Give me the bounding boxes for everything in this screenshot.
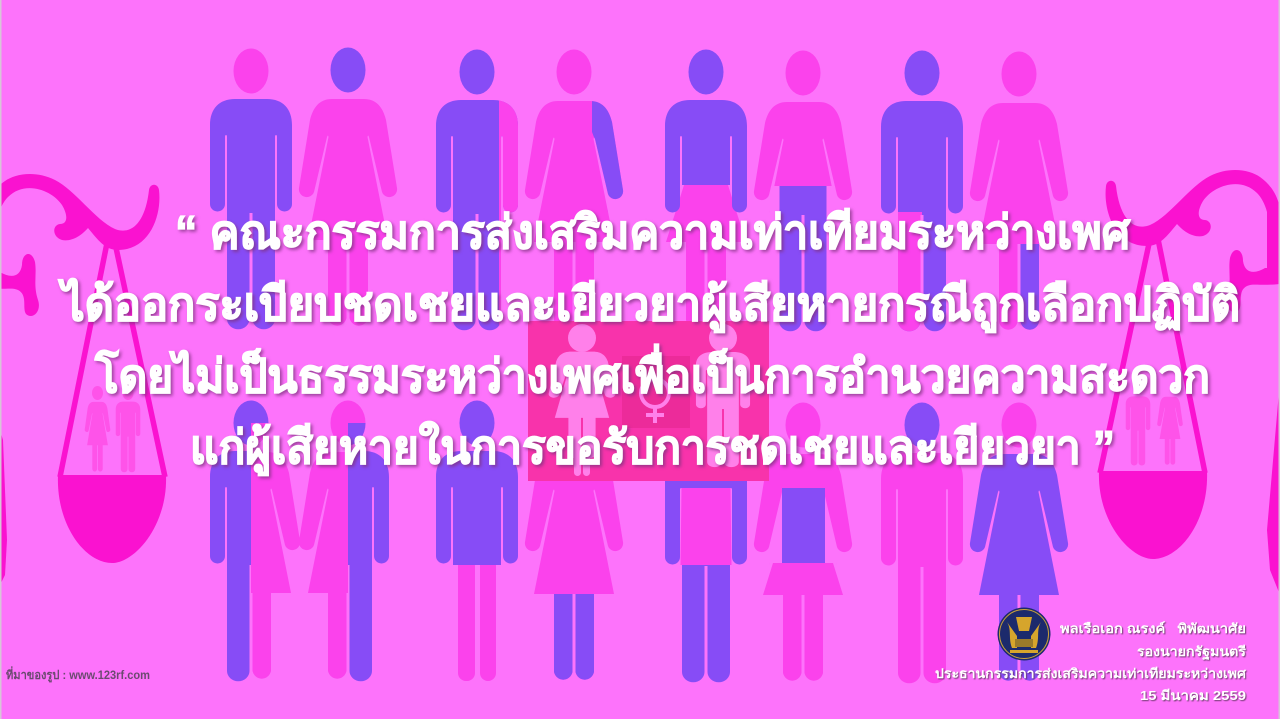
- figure: woman with purple torso: [754, 402, 852, 681]
- icon: right scale pan: [1099, 170, 1280, 595]
- icon: couple in right scale pan: [1126, 396, 1183, 465]
- signature text block: ประธานกรรมการส่งเสริมความเท่าเทียมระหว่างเพศ: [935, 666, 1247, 681]
- figure: man with pink tunic: [665, 402, 747, 682]
- icon: female symbol: [641, 379, 669, 423]
- figure: woman with one purple leg: [970, 52, 1068, 330]
- signature text block: พลเรือเอก ณรงค์ พิพัฒนาศัย: [1060, 621, 1246, 636]
- left pole: [0, 430, 7, 585]
- icon: couple in left scale pan: [85, 386, 140, 472]
- icon: woman: [549, 324, 615, 476]
- figure: woman with purple legs: [524, 481, 624, 680]
- signature text block: [935, 621, 1247, 703]
- figure: man with pink skirt: [665, 50, 747, 321]
- figure: pink man: [881, 402, 963, 683]
- icon: left scale pan: [0, 174, 166, 585]
- figure: man, pink head: [210, 48, 292, 329]
- figure: half man half woman: [202, 400, 300, 681]
- figure: man with pink legs: [436, 400, 518, 681]
- figures: bottom row of men and women: [202, 400, 1068, 683]
- figure: purple woman: [970, 402, 1068, 681]
- icon: government seal: [998, 608, 1050, 660]
- figure: man with pink arm: [436, 50, 518, 330]
- figure: woman with purple arm: [525, 50, 623, 328]
- image source credit: ที่มาของรูป : www.123rf.com: [6, 666, 150, 683]
- figure: woman top with purple trousers: [754, 50, 852, 331]
- figures: top row of men and women: [210, 48, 1068, 331]
- icon: man: [696, 324, 750, 467]
- main quote text: ได้ออกระเบียบชดเชยและเยียวยาผู้เสียหายกรณีถูกเลือกปฏิบัติ: [57, 278, 1240, 333]
- inner square: [622, 356, 690, 428]
- figure: man with one pink leg: [881, 50, 963, 331]
- right pole: [1267, 380, 1280, 595]
- figure: woman, purple head: [299, 48, 397, 326]
- main quote text: “ คณะกรรมการส่งเสริมความเท่าเทียมระหว่างเพศ: [175, 206, 1131, 258]
- main quote text: โดยไม่เป็นธรรมระหว่างเพศเพื่อเป็นการอำนวยความสะดวก: [94, 344, 1210, 402]
- figure: half woman half man: [299, 400, 397, 681]
- signature text block: 15 มีนาคม 2559: [1140, 688, 1246, 703]
- main quote text: แก่ผู้เสียหายในการขอรับการชดเชยและเยียวยา ”: [190, 420, 1115, 476]
- main quote text: [57, 206, 1240, 476]
- signature text block: รองนายกรัฐมนตรี: [1137, 644, 1246, 661]
- panel: central gender square: [528, 321, 769, 481]
